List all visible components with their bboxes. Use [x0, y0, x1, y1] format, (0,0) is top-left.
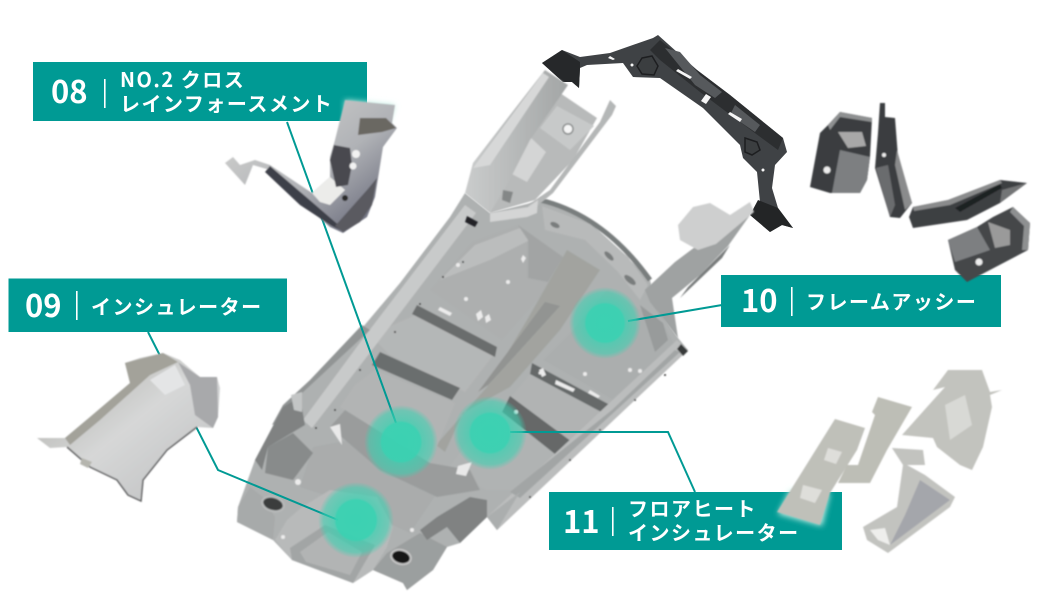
highlight 08 — [364, 405, 438, 479]
parts 11: floor heat insulators — [777, 370, 1002, 553]
leader line 09 — [148, 332, 338, 520]
panel between members — [370, 313, 495, 392]
lower panels — [340, 370, 455, 463]
left front strut tower — [465, 70, 616, 227]
highlight 10 — [569, 287, 641, 359]
right front strut tower — [645, 202, 754, 338]
label 11 — [549, 492, 842, 550]
main body silhouette — [237, 193, 688, 590]
leader line 11 — [510, 432, 695, 492]
part 08: cross reinforcement — [225, 100, 397, 233]
label 11: インシュレーター — [628, 517, 800, 546]
label 08: レインフォースメント — [120, 88, 333, 117]
label 09: インシュレーター — [91, 291, 263, 320]
right floor panel — [543, 290, 675, 400]
rear corners — [237, 487, 275, 540]
part 09: insulator — [37, 353, 220, 501]
car underbody floor structure — [237, 193, 688, 590]
label 10 — [721, 275, 1001, 327]
white gaps — [330, 424, 342, 445]
insulator piece 2 — [838, 397, 912, 483]
frame piece B — [875, 103, 912, 218]
left wheel arch — [265, 433, 313, 480]
cross members dark — [412, 305, 497, 357]
label 10: 10 — [741, 276, 778, 321]
centre tunnel — [436, 250, 600, 452]
highlight 09 — [318, 482, 394, 558]
highlight 11 — [453, 396, 527, 470]
rear shelf arch — [540, 200, 650, 280]
label 08: 08 — [51, 67, 88, 112]
right rocker — [487, 340, 688, 530]
leader line 08 — [287, 122, 396, 423]
frame piece C — [909, 180, 1027, 228]
front floor panel — [430, 225, 563, 340]
spare wheel well — [275, 490, 393, 583]
parts 10: frame assemblies — [810, 103, 1030, 282]
rear floor — [300, 440, 437, 533]
label 08 — [33, 62, 367, 121]
floor slits and dots — [281, 255, 642, 539]
black radiator frame — [542, 35, 793, 232]
insulator piece 1 — [777, 419, 865, 526]
insulator piece 4 — [863, 448, 955, 553]
round holes — [261, 494, 285, 514]
label 08: NO.2 クロス — [120, 64, 245, 93]
right wheel arch — [420, 497, 487, 543]
label 11: 11 — [563, 497, 600, 542]
leader line 10 — [628, 305, 722, 321]
frame piece D — [948, 207, 1030, 282]
label 09 — [8, 278, 287, 332]
frame piece A — [810, 112, 872, 193]
label 10: フレームアッシー — [806, 286, 977, 315]
left rocker — [303, 205, 476, 428]
label 11: フロアヒート — [628, 493, 757, 522]
label 09: 09 — [25, 281, 62, 326]
insulator piece 3 — [902, 370, 1002, 470]
